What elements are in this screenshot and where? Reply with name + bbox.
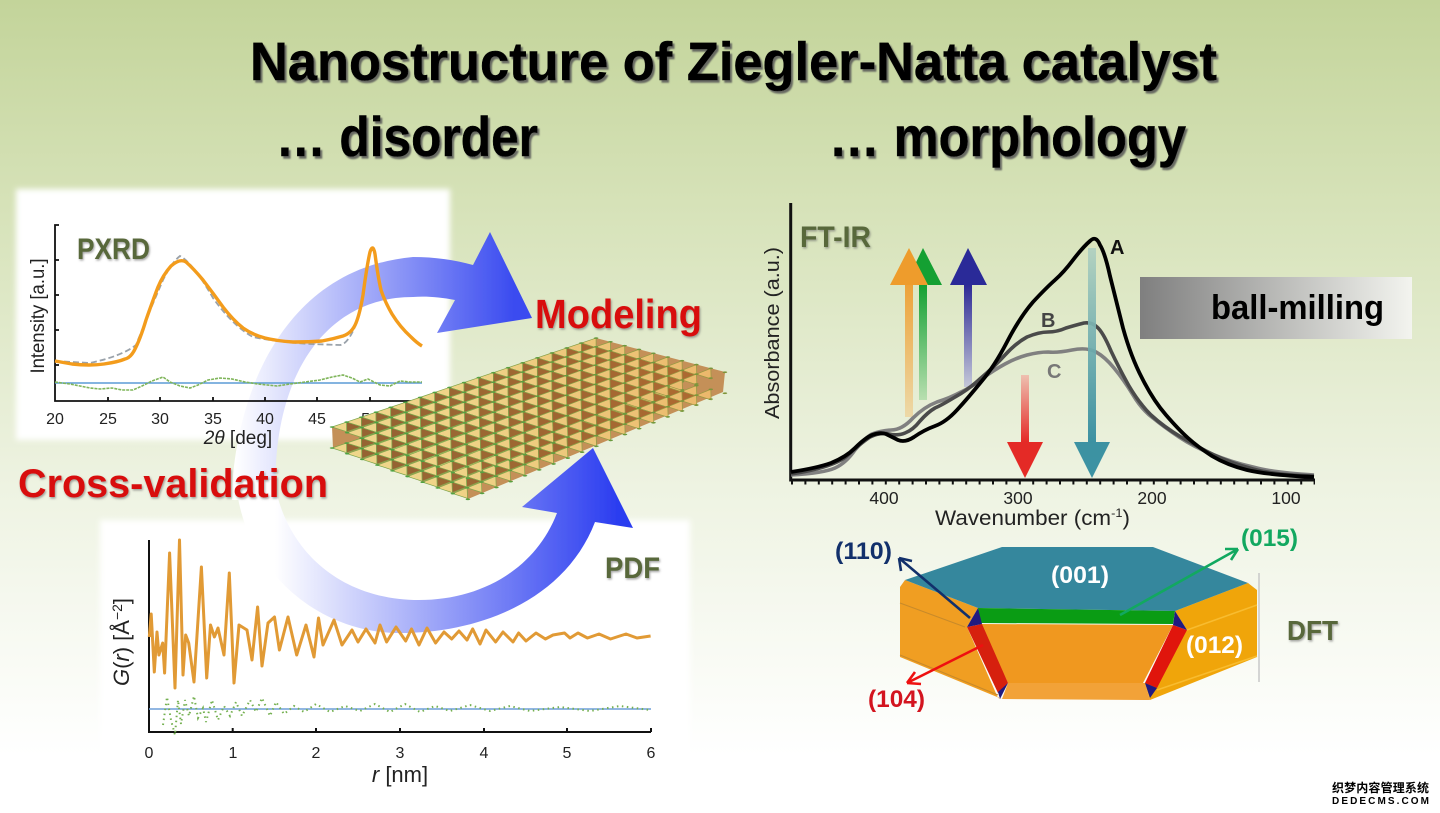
label (012): (012): [1186, 632, 1243, 659]
label (110): (110): [835, 538, 892, 565]
watermark latin text: DEDECMS.COM: [1332, 796, 1429, 807]
PXRD x-axis label: 2θ [deg]: [203, 428, 272, 449]
title: Nanostructure of Ziegler-Natta catalyst: [250, 32, 1217, 92]
crystal right edge line: [1258, 573, 1260, 682]
IR tick labels: 300: [1003, 488, 1033, 508]
curve A: [791, 239, 1314, 477]
IR tick labels: 100: [1271, 488, 1301, 508]
PXRD tick labels: 50: [361, 411, 379, 428]
PDF heading: PDF: [605, 552, 660, 585]
IR tick labels: 400: [869, 488, 899, 508]
PXRD y-axis label: Intensity [a.u.]: [28, 258, 49, 374]
PDF axes: [149, 540, 651, 732]
PXRD tick labels: 25: [99, 411, 117, 428]
IR tick labels: 200: [1137, 488, 1167, 508]
PXRD fit dashed curve: [55, 256, 360, 363]
PDF tick labels: 6: [647, 745, 656, 762]
PXRD tick labels: 45: [308, 411, 326, 428]
PDF y-axis label: ]: [109, 598, 134, 604]
PXRD heading: PXRD: [77, 233, 150, 266]
lattice solid underlay: [332, 338, 725, 499]
heading: disorder: … disorder: [276, 105, 538, 168]
crystal morphology diagram: [835, 525, 1338, 713]
curve B: [791, 323, 1314, 476]
ball-milling gradient bar: [1140, 277, 1412, 339]
IR x-axis label: Wavenumber (cm: [935, 507, 1100, 530]
label (104): (104): [868, 686, 925, 713]
PDF tick labels: 5: [563, 745, 572, 762]
curve label B: B: [1041, 310, 1055, 332]
PDF tick labels: 0: [145, 745, 154, 762]
arrow: red to (104): [907, 645, 983, 684]
arrow: green to (015): [1120, 549, 1238, 615]
PDF residual noise: [163, 696, 650, 735]
bottom front face: [1002, 683, 1150, 700]
navy facet corners (110): [967, 608, 1187, 699]
chart: PXRD: [28, 225, 425, 449]
left side faces: [900, 580, 1002, 699]
PDF y-axis label: G(r) [Å: [109, 620, 134, 686]
top face (001): [905, 547, 1248, 611]
IR y-axis label: Absorbance (a.u.): [762, 247, 784, 419]
IR x-axis label: ): [1123, 507, 1130, 530]
arrow: navy to (110): [899, 558, 970, 618]
PDF orange curve: [149, 540, 651, 688]
PXRD tick labels: 20: [46, 411, 64, 428]
chart: FT-IR: [762, 203, 1315, 530]
PDF residual baseline: [149, 708, 651, 710]
IR heading: FT-IR: [800, 221, 871, 254]
red facet left (104): [967, 624, 1008, 693]
arrow: upper curved blue arrow: [232, 232, 532, 500]
PXRD tick labels: [46, 411, 379, 428]
IR axes: [791, 203, 1315, 480]
lattice lower layer: [329, 358, 728, 500]
PDF tick labels: [145, 745, 656, 762]
IR tick labels: [869, 488, 1301, 508]
IR minor ticks: [791, 482, 1315, 484]
IR x-axis label: -1: [1111, 506, 1123, 520]
PDF tick labels: 3: [396, 745, 405, 762]
curve label C: C: [1047, 361, 1061, 383]
arrow: red down: [1007, 375, 1043, 478]
watermark: [1330, 777, 1432, 807]
PDF tick labels: 1: [229, 745, 238, 762]
label (015): (015): [1241, 525, 1298, 552]
chart: PDF: [109, 540, 660, 787]
right side faces: [1145, 583, 1257, 700]
ball-milling label: ball-milling: [1211, 289, 1384, 327]
watermark chinese text: 织梦内容管理系统: [1332, 780, 1429, 795]
PXRD orange curve: [55, 248, 422, 365]
arrow: navy up: [950, 248, 987, 387]
arrow: teal down: [1074, 248, 1110, 478]
PXRD residual noise: [55, 375, 422, 390]
green face (015): [978, 608, 1175, 624]
PXRD tick labels: 30: [151, 411, 169, 428]
label: Cross-validation: Cross-validation: [18, 462, 328, 506]
panel: PDF white backdrop: [100, 520, 690, 813]
front orange face: [980, 624, 1173, 683]
curve label A: A: [1110, 237, 1124, 259]
red facet right (104): [1145, 625, 1187, 688]
PDF tick labels: 2: [312, 745, 321, 762]
lattice colour overlay: [330, 337, 728, 500]
crystal lattice slab: [330, 337, 728, 500]
label DFT: DFT: [1287, 615, 1338, 646]
PXRD tick labels: 40: [256, 411, 274, 428]
panel: PXRD white backdrop: [16, 189, 450, 440]
label (001): (001): [1051, 562, 1109, 589]
PDF y-axis label: −2: [109, 604, 125, 620]
arrow: green up: [905, 248, 942, 400]
arrow: lower curved blue arrow: [236, 448, 633, 633]
arrow: orange up: [890, 248, 928, 417]
heading: morphology: … morphology: [829, 105, 1186, 168]
PXRD residual baseline: [55, 382, 422, 384]
label: Modeling: Modeling: [535, 291, 702, 337]
PDF tick labels: 4: [480, 745, 489, 762]
PXRD axes: [55, 225, 425, 401]
curve C: [791, 349, 1314, 475]
PXRD tick labels: 35: [204, 411, 222, 428]
PDF x-axis label: r [nm]: [372, 762, 428, 787]
lattice top layer: [329, 337, 728, 479]
